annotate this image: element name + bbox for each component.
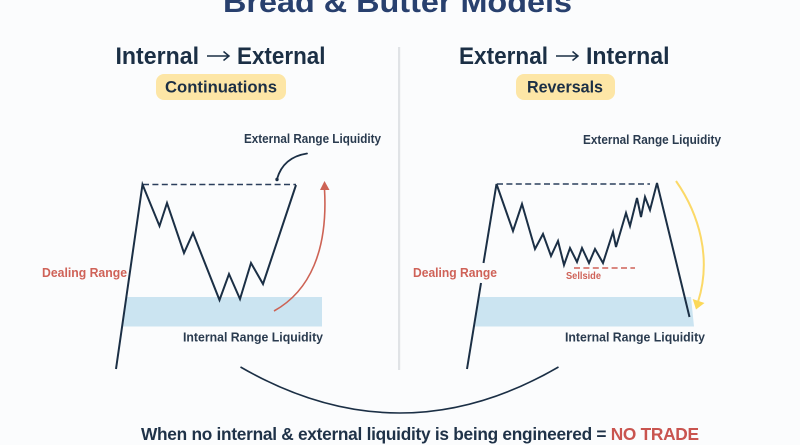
price path	[467, 183, 690, 369]
pill: reversals: Reversals	[527, 78, 603, 96]
label: external range liquidity: External Range Liquidity	[244, 132, 381, 146]
label: internal range liquidity: Internal Range Liquidity	[183, 330, 323, 344]
price path	[116, 184, 296, 369]
heading: external to internal: Internal	[586, 43, 670, 70]
red arrow	[274, 181, 330, 311]
heading: external to internal: External	[459, 43, 548, 70]
sellside dashed line	[574, 267, 635, 269]
yellow arrow	[676, 181, 704, 310]
heading: external to internal	[459, 43, 670, 70]
label: sellside: Sellside	[566, 270, 601, 282]
heading: internal to external	[116, 43, 326, 70]
heading: internal to external: Internal	[116, 43, 199, 70]
internal range liquidity zone	[475, 297, 694, 326]
pill: continuations	[156, 74, 286, 100]
bottom statement: When no internal & external liquidity is being engineered = NO TRADE	[141, 424, 699, 444]
connecting arc	[240, 367, 558, 413]
panel: continuations	[42, 43, 381, 369]
center divider	[398, 47, 400, 370]
pill: reversals	[516, 74, 615, 100]
callout arrow	[276, 154, 307, 180]
label: dealing range: Dealing Range	[42, 265, 127, 280]
external level dashed line	[497, 183, 650, 185]
panel: reversals	[413, 43, 721, 369]
heading: internal to external: External	[237, 43, 326, 70]
label: internal range liquidity: Internal Range Liquidity	[565, 330, 705, 344]
internal range liquidity zone	[123, 297, 322, 326]
label: external range liquidity: External Range Liquidity	[583, 133, 721, 147]
external level dashed line	[143, 184, 296, 186]
label: dealing range: Dealing Range	[413, 265, 497, 280]
pill: continuations: Continuations	[165, 78, 277, 96]
